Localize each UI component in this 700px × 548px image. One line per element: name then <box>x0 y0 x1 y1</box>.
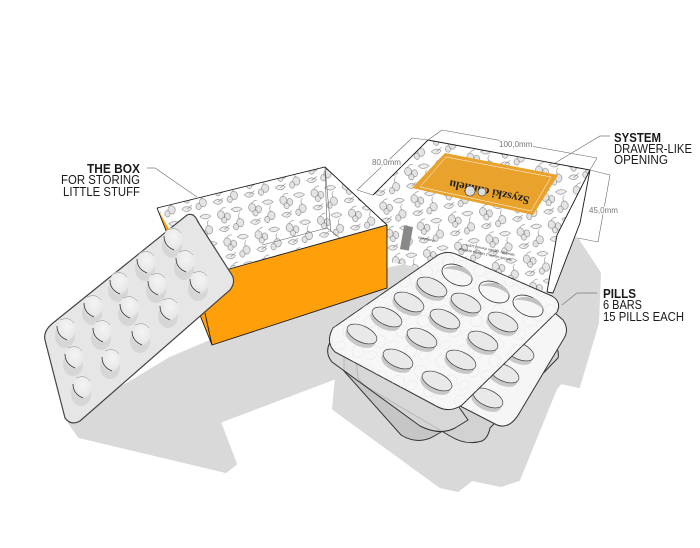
lower sheet A <box>400 300 566 426</box>
leader: the box <box>147 168 197 197</box>
box side face <box>547 170 590 293</box>
pill sheet flat <box>45 214 234 423</box>
label: pills <box>603 287 684 324</box>
label: system: SYSTEM <box>614 131 661 145</box>
label: system: OPENING <box>614 153 668 167</box>
box top face with pattern <box>373 140 590 235</box>
dimensions <box>357 130 610 242</box>
back text: Sposób użycia: 1 tabletka dziennie <box>459 247 512 262</box>
closed box <box>373 140 590 293</box>
label: pills: PILLS <box>603 287 636 301</box>
leader: system <box>555 136 610 163</box>
label: the box: LITTLE STUFF <box>63 185 140 199</box>
back text: Składniki: szyszki chmielu 100% <box>465 243 515 257</box>
label: the box: THE BOX <box>87 162 141 176</box>
label: the box: FOR STORING <box>61 173 140 187</box>
back text: Masa netto <box>417 235 435 243</box>
top sheet <box>329 252 559 410</box>
inner walls with pattern <box>157 167 387 278</box>
floor shadow <box>69 238 600 491</box>
barcode <box>400 225 413 251</box>
dimension: 45 mm: 45,0mm <box>589 206 618 215</box>
back text <box>417 235 515 262</box>
dimension: 100 mm: 100,0mm <box>499 140 533 149</box>
pill stack <box>328 252 566 443</box>
label: system: DRAWER-LIKE <box>614 142 692 156</box>
box front face with pattern <box>373 195 557 292</box>
orange front face <box>197 225 387 345</box>
dimension: 80 mm: 80,0mm <box>372 158 401 167</box>
orange label <box>412 153 558 215</box>
lower sheet C <box>344 340 470 440</box>
lower sheet D <box>328 335 468 432</box>
lower sheet B <box>356 320 558 443</box>
label: pills: 6 BARS <box>603 298 642 312</box>
label: the box <box>61 162 141 199</box>
label: system <box>614 131 692 167</box>
open box <box>157 167 387 345</box>
leader: pills <box>562 293 597 305</box>
orange left face <box>157 208 212 345</box>
orange label: Szyszki chmielu <box>448 177 531 208</box>
label: pills: 15 PILLS EACH <box>603 310 684 324</box>
